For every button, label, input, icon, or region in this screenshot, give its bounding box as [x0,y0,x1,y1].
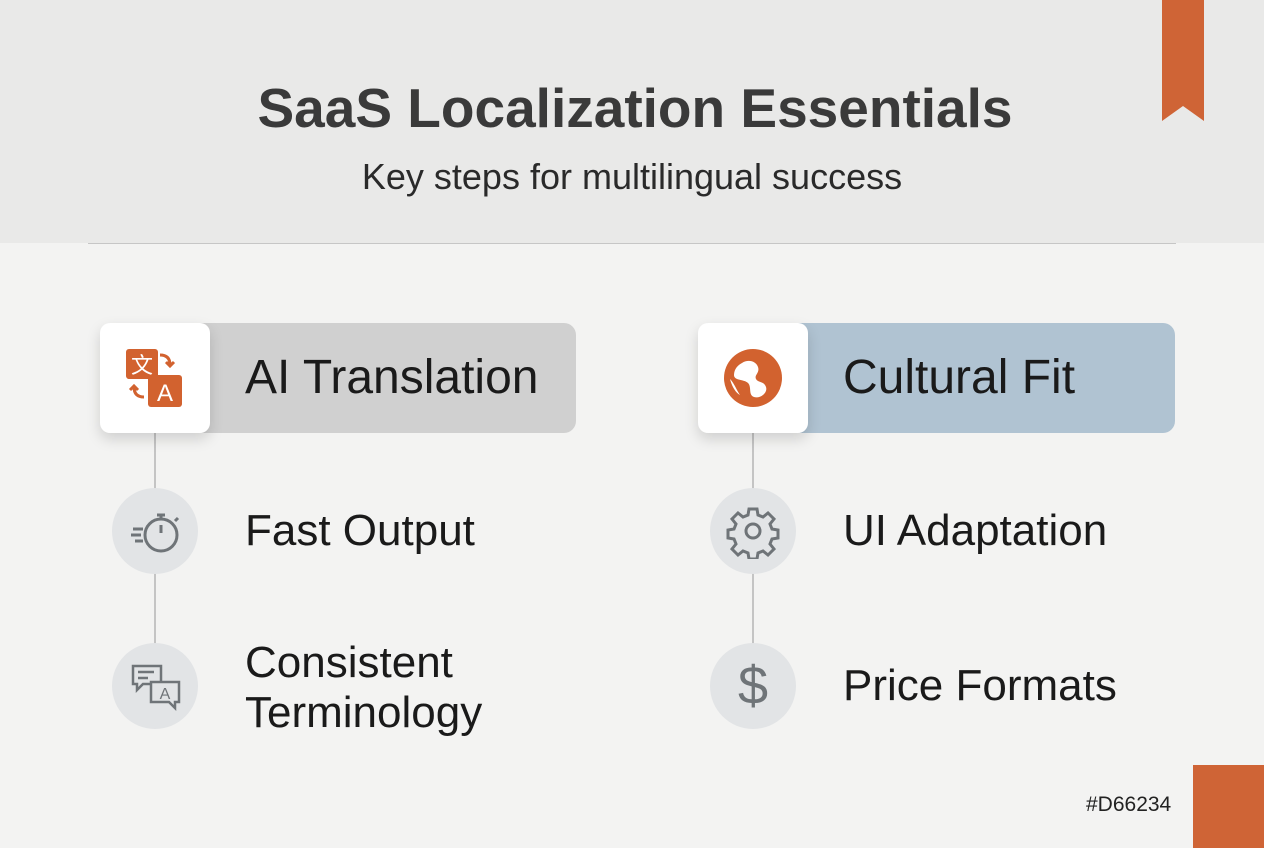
item: Fast Output [112,488,475,574]
subtitle: Key steps for multilingual success [362,156,902,197]
label: UI Adaptation [843,506,1107,555]
item: UI Adaptation [710,488,1107,574]
header band [0,0,1264,243]
label: Price Formats [843,661,1117,710]
icon: stopwatch [112,488,198,574]
label: Terminology [245,688,482,737]
panel: Cultural Fit [693,323,1175,444]
title: SaaS Localization Essentials [257,77,1012,139]
icon: dollar [710,643,796,729]
icon: globe [698,323,808,433]
label [245,638,482,737]
color swatch [1193,765,1264,848]
item: Price Formats [710,643,1117,729]
connector lines [154,433,156,688]
bookmark ribbon [1162,0,1204,121]
icon: chat bubbles [112,643,198,729]
label: Fast Output [245,506,475,555]
hex code label: #D66234 [1086,793,1171,816]
label: Consistent [245,638,453,687]
icon: gear [710,488,796,574]
panel: AI Translation [95,323,576,444]
label: Cultural Fit [843,351,1075,404]
icon: translate: A [157,380,173,407]
icon: translate [100,323,210,433]
icon: translate: 文 [131,348,153,380]
icon: chat bubbles: A [160,686,171,703]
item: Consistent Terminology [112,638,482,737]
icon: dollar: $ [738,656,768,716]
label: AI Translation [245,351,538,404]
